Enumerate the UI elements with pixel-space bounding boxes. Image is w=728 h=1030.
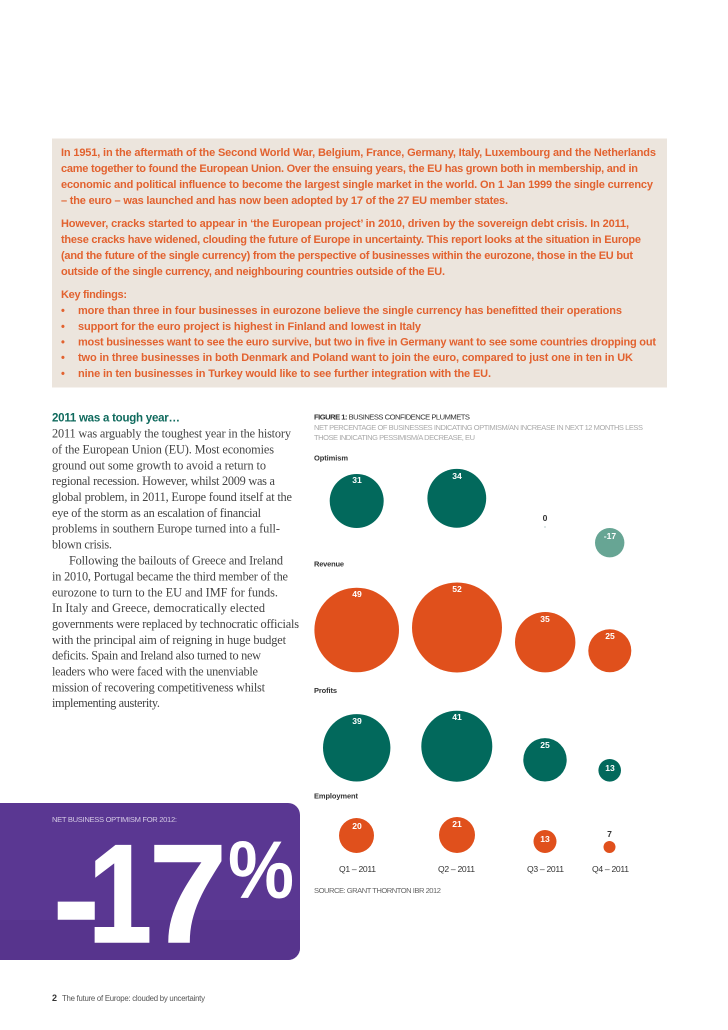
text block: key findings: more than three in four businesses in eurozone believe the single currency has benefitted their operations [78, 305, 622, 317]
chart axis: quarter labels: Q3 – 2011 [527, 864, 564, 874]
chart: profits bubbles: Profits [314, 686, 337, 695]
text block: article body: of the European Union (EU). Most economies [52, 442, 274, 456]
text block: introduction second paragraph: (and the future of the single currency) from the perspective of businesses within the eurozone, those in the EU but [61, 250, 633, 262]
chart: revenue bubbles [314, 560, 631, 672]
chart: employment bubbles [314, 792, 616, 853]
text block: article body: problems in southern Europe turned into a full- [52, 522, 280, 536]
text block: introduction second paragraph [61, 218, 641, 278]
chart: revenue bubbles: 25 [605, 631, 615, 641]
chart: profits bubbles: 25 [540, 740, 550, 750]
heading: figure 1 title and subtitle: THOSE INDICATING PESSIMISM/A DECREASE, EU [314, 433, 475, 442]
chart: profits bubbles: 41 [452, 712, 462, 722]
text block: article body: eye of the storm as an escalation of financial [52, 506, 262, 520]
text block: article body: mission of recovering competitiveness whilst [52, 680, 266, 694]
text block: key findings: • [61, 336, 65, 348]
text block: introduction first paragraph [61, 147, 656, 207]
text block: introduction first paragraph: economic and political influence to become the largest single market in the world. On 1 Jan 1999 the single currency [61, 179, 654, 191]
text block: article body: governments were replaced by technocratic officials [52, 617, 299, 631]
chart: employment bubbles: 21 [452, 819, 462, 829]
text block: article body: implementing austerity. [52, 696, 160, 710]
text block: key findings: • [61, 305, 65, 317]
chart: profits bubbles: 13 [605, 763, 615, 773]
source note: SOURCE: GRANT THORNTON IBR 2012 [314, 886, 441, 895]
chart: employment bubbles: 20 [352, 821, 362, 831]
heading: 2011 was a tough year: 2011 was a tough year… [52, 412, 180, 424]
chart: profits bubbles [314, 686, 621, 782]
text block: introduction first paragraph: came together to found the European Union. Over the ensuing years, the EU has grown both in membership, and in [61, 163, 638, 175]
text block: introduction second paragraph: outside of the single currency, and neighbouring countries outside of the EU. [61, 266, 445, 278]
text block: key findings: • [61, 368, 65, 380]
text block: article body: global problem, in 2011, Europe found itself at the [52, 490, 293, 504]
chart axis: quarter labels: Q4 – 2011 [592, 864, 629, 874]
text block: article body: Following the bailouts of Greece and Ireland [69, 554, 283, 568]
text block: key findings [61, 289, 656, 380]
chart: employment bubbles: 13 [540, 834, 550, 844]
chart axis: quarter labels [339, 864, 629, 874]
text block: article body: 2011 was arguably the toughest year in the history [52, 427, 292, 441]
text block: key findings: Key findings: [61, 289, 127, 301]
callout: net business optimism for 2012: 7 [149, 815, 227, 972]
chart: revenue bubbles: Revenue [314, 560, 344, 569]
chart axis: quarter labels: Q1 – 2011 [339, 864, 376, 874]
text block: article body: leaders who were faced with the unenviable [52, 664, 259, 678]
text block: article body: blown crisis. [52, 538, 112, 552]
callout: net business optimism for 2012: - [53, 820, 100, 977]
text block: article body: deficits. Spain and Ireland also turned to new [52, 649, 261, 663]
text block: key findings: • [61, 352, 65, 364]
chart: optimism bubbles: 34 [452, 471, 462, 481]
chart axis: quarter labels: Q2 – 2011 [438, 864, 475, 874]
text block: key findings: nine in ten businesses in Turkey would like to see further integration with the EU. [78, 368, 491, 380]
heading: figure 1 title and subtitle [314, 412, 643, 442]
text block: introduction first paragraph: In 1951, in the aftermath of the Second World War, Belgium, France, Germany, Italy, Luxembourg and the Netherlands [61, 147, 656, 159]
callout: net business optimism for 2012: NET BUSINESS OPTIMISM FOR 2012: [52, 815, 177, 824]
chart: revenue bubbles: 52 [452, 584, 462, 594]
text block: introduction second paragraph: However, cracks started to appear in ‘the European project’ in 2010, driven by the sovereign debt crisis. In 2011, [61, 218, 629, 230]
callout: net business optimism for 2012: % [228, 825, 294, 916]
chart: optimism bubbles: 31 [352, 475, 362, 485]
text block: article body: regional recession. However, whilst 2009 was a [52, 474, 276, 488]
text block: article body: In Italy and Greece, democratically elected [52, 601, 265, 615]
heading: figure 1 title and subtitle: NET PERCENTAGE OF BUSINESSES INDICATING OPTIMISM/AN INCREASE IN NEXT 12 MONTHS LESS [314, 423, 643, 432]
callout: net business optimism for 2012: 1 [88, 815, 152, 972]
chart: revenue bubbles: 35 [540, 614, 550, 624]
callout: net business optimism for 2012 [0, 803, 300, 977]
text block: article body: in 2010, Portugal became the third member of the [52, 570, 289, 584]
chart: optimism bubbles [314, 454, 624, 557]
text block: article body: ground out some growth to avoid a return to [52, 458, 266, 472]
text block: article body [52, 427, 299, 710]
text block: key findings: most businesses want to see the euro survive, but two in five in Germany want to see some countries dropping out [78, 336, 656, 348]
chart: profits bubbles: 39 [352, 716, 362, 726]
chart: optimism bubbles: -17 [604, 531, 616, 541]
text block: key findings: support for the euro project is highest in Finland and lowest in Italy [78, 321, 422, 333]
text block: introduction first paragraph: – the euro – was launched and has now been adopted by 17 of the 27 EU member states. [61, 195, 508, 207]
text block: key findings: two in three businesses in both Denmark and Poland want to join the euro, compared to just one in ten in UK [78, 352, 633, 364]
panel: introduction and key findings [52, 138, 667, 388]
text block: introduction second paragraph: these cracks have widened, clouding the future of Europe in uncertainty. This report looks at the situation in Europe [61, 234, 641, 246]
text block: key findings: • [61, 321, 65, 333]
footer: page number and title: 2 [52, 993, 57, 1003]
chart: revenue bubbles: 49 [352, 589, 362, 599]
chart: optimism bubbles: 0 [543, 513, 548, 523]
footer: page number and title: The future of Europe: clouded by uncertainty [62, 994, 205, 1003]
chart: employment bubbles: Employment [314, 792, 358, 801]
text block: article body: with the principal aim of reigning in huge budget [52, 633, 287, 647]
chart: optimism bubbles: Optimism [314, 454, 348, 463]
text block: article body: eurozone to turn to the EU and IMF for funds. [52, 585, 278, 599]
chart: employment bubbles: 7 [607, 829, 612, 839]
heading: figure 1 title and subtitle: FIGURE 1: BUSINESS CONFIDENCE PLUMMETS [314, 412, 470, 422]
